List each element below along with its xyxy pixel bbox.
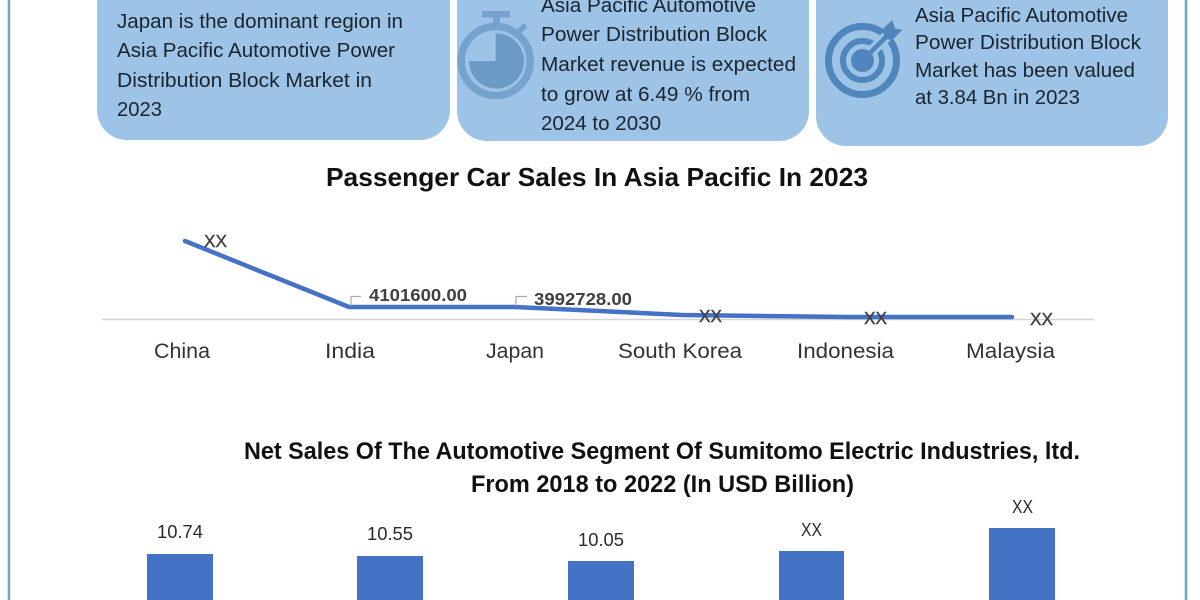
data labels: XX: [204, 231, 227, 251]
text: revenue growth: Market revenue is expected: [541, 53, 796, 76]
text: market value: [915, 4, 1142, 109]
bar value labels: 10.05: [578, 530, 624, 550]
data labels: [204, 231, 1053, 329]
heading: net sales: [244, 438, 1080, 498]
icon: stopwatch: [461, 11, 530, 96]
category labels: China: [154, 339, 210, 363]
category labels: Indonesia: [797, 339, 894, 363]
bar value labels: 10.55: [367, 524, 413, 544]
text: market value: Asia Pacific Automotive: [915, 4, 1128, 27]
category labels: [154, 339, 1055, 363]
data labels: 3992728.00: [534, 289, 632, 309]
line chart: passenger car sales: [102, 231, 1094, 363]
bar value labels: [157, 497, 1033, 550]
bar value labels: XX: [801, 520, 822, 540]
text: revenue growth: 2024 to 2030: [541, 112, 661, 135]
leader lines: [351, 296, 527, 306]
panel: dominant region: [97, 0, 450, 140]
data labels: XX: [699, 306, 722, 326]
bar value labels: 10.74: [157, 522, 203, 542]
bar value labels: XX: [1012, 497, 1033, 517]
text: dominant region: 2023: [117, 98, 162, 121]
text: market value: at 3.84 Bn in 2023: [915, 86, 1080, 109]
data line: [185, 241, 1012, 317]
category labels: South Korea: [618, 339, 742, 363]
text: dominant region: Distribution Block Market in: [117, 69, 372, 92]
text: revenue growth: [541, 0, 796, 135]
data labels: XX: [1030, 309, 1053, 329]
text: dominant region: [117, 10, 403, 121]
bar chart: net sales: [147, 497, 1055, 600]
panel: market value: [816, 0, 1168, 146]
data labels: 4101600.00: [369, 285, 467, 305]
text: dominant region: Asia Pacific Automotive Power: [117, 39, 395, 62]
heading: net sales: Net Sales Of The Automotive Segment Of Sumitomo Electric Industries, ltd.: [244, 438, 1080, 465]
panel: revenue growth: [457, 0, 809, 141]
heading: net sales: From 2018 to 2022 (In USD Billion): [471, 471, 854, 498]
bars: [147, 528, 1055, 600]
icon: target with arrow: [828, 20, 902, 94]
category labels: Malaysia: [966, 339, 1055, 363]
text: revenue growth: Power Distribution Block: [541, 23, 768, 46]
category labels: Japan: [486, 339, 544, 363]
text: dominant region: Japan is the dominant region in: [117, 10, 403, 33]
category labels: India: [325, 339, 375, 363]
text: market value: Power Distribution Block: [915, 31, 1142, 54]
data labels: XX: [864, 308, 887, 328]
text: revenue growth: to grow at 6.49 % from: [541, 83, 750, 106]
heading: passenger car sales: Passenger Car Sales In Asia Pacific In 2023: [326, 162, 868, 192]
text: market value: Market has been valued: [915, 59, 1135, 82]
